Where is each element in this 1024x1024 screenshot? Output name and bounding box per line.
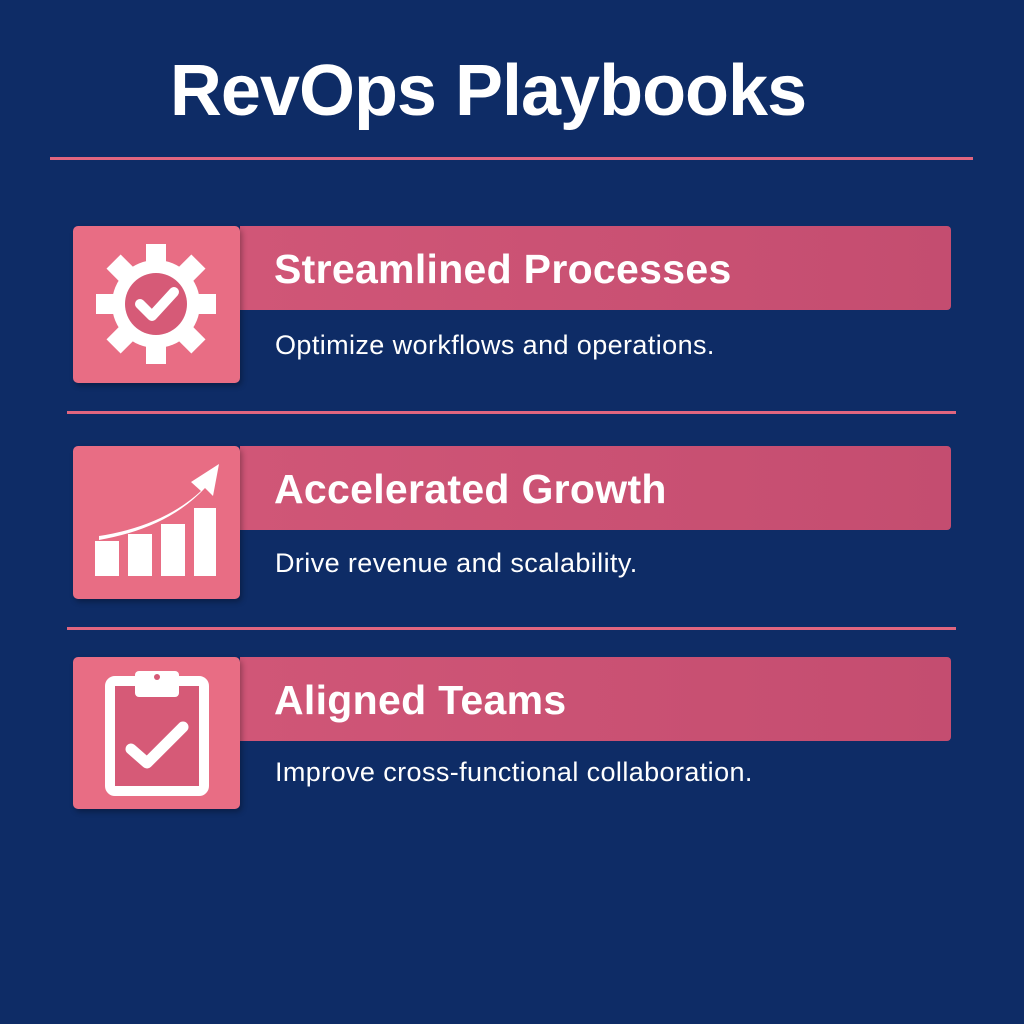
icon: gear check [73,226,240,383]
header bar [240,446,951,530]
icon: growth chart [73,446,240,599]
panel: accelerated growth [73,446,951,604]
header bar: Streamlined Processes [274,246,732,292]
header bar: Aligned Teams [274,677,566,723]
description 1: Optimize workflows and operations. [275,330,715,360]
icon: clipboard check [73,657,240,809]
description 2: Drive revenue and scalability. [275,548,638,578]
header bar [240,226,951,310]
panel: aligned teams [73,657,951,814]
title: RevOps Playbooks [170,51,806,131]
description 3: Improve cross-functional collaboration. [275,757,753,787]
panel: streamlined processes [73,226,951,388]
header bar: Accelerated Growth [274,466,667,512]
header bar [240,657,951,741]
